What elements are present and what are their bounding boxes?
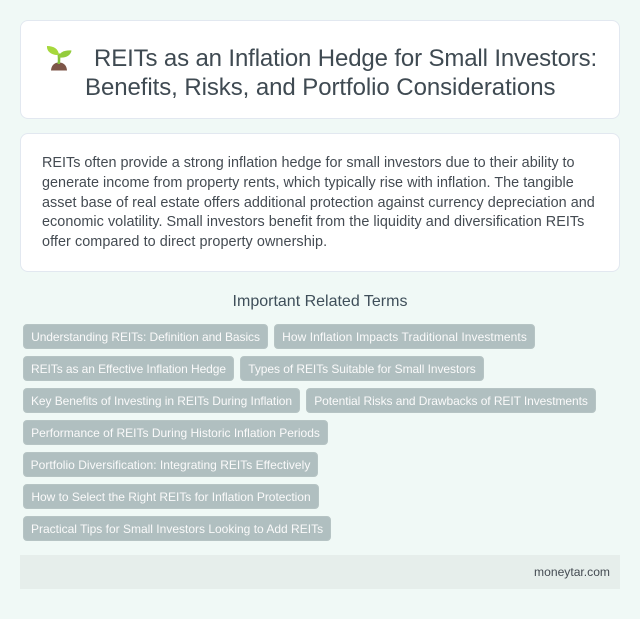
tag — [23, 484, 319, 509]
tag — [23, 356, 234, 381]
tag: Portfolio Diversification: Integrating REITs Effectively — [31, 458, 310, 472]
tag — [306, 388, 596, 413]
title: REITs as an Inflation Hedge for Small Investors: — [94, 45, 597, 72]
tag — [23, 452, 318, 477]
footer bar — [20, 555, 620, 589]
summary text: economic volatility. Small investors benefit from the liquidity and diversification REITs — [42, 214, 584, 230]
tag — [274, 324, 535, 349]
tag: How Inflation Impacts Traditional Investments — [282, 330, 527, 344]
tag: Key Benefits of Investing in REITs During Inflation — [31, 394, 292, 408]
title: Benefits, Risks, and Portfolio Considerations — [85, 74, 555, 101]
tag: Potential Risks and Drawbacks of REIT Investments — [314, 394, 588, 408]
tag — [23, 388, 300, 413]
summary text: REITs often provide a strong inflation hedge for small investors due to their ability to — [42, 155, 575, 171]
tag: How to Select the Right REITs for Inflation Protection — [31, 490, 311, 504]
footer source: moneytar.com — [534, 565, 610, 579]
tag: Types of REITs Suitable for Small Investors — [248, 362, 476, 376]
tag — [23, 516, 331, 541]
related terms heading: Important Related Terms — [233, 293, 407, 310]
summary card — [20, 133, 620, 272]
tag — [23, 324, 268, 349]
summary text — [42, 155, 595, 250]
icon: seedling — [46, 46, 72, 70]
tag: Understanding REITs: Definition and Basics — [31, 330, 260, 344]
summary text: offer compared to direct property ownership. — [42, 234, 327, 250]
tag — [240, 356, 484, 381]
tag: REITs as an Effective Inflation Hedge — [31, 362, 226, 376]
related terms tags — [23, 324, 596, 541]
tag — [23, 420, 328, 445]
summary text: generate income from property rents, which typically rise with inflation. The tangible — [42, 175, 574, 191]
tag: Performance of REITs During Historic Inflation Periods — [31, 426, 320, 440]
title — [85, 45, 597, 101]
header card — [20, 20, 620, 119]
summary text: asset base of real estate offers additional protection against currency depreciation and — [42, 195, 595, 211]
tag: Practical Tips for Small Investors Looking to Add REITs — [31, 522, 323, 536]
